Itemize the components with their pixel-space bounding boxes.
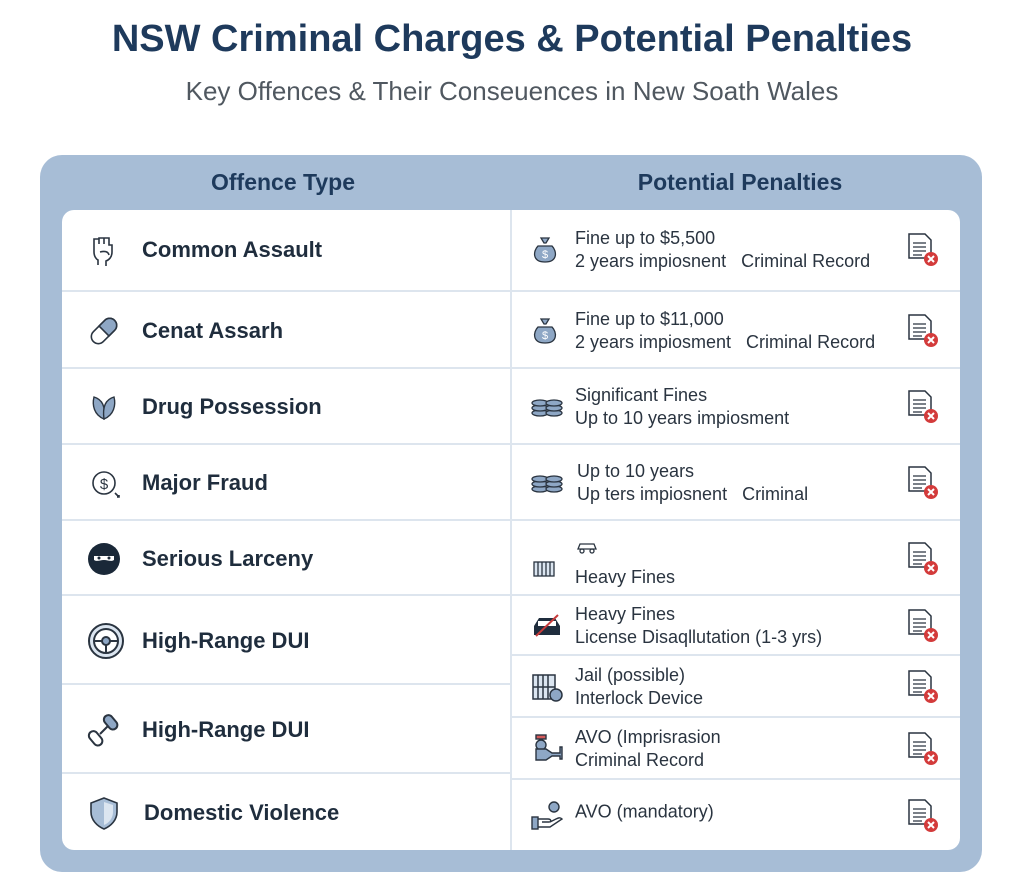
offence: major fraud (62, 443, 511, 521)
subtitle: Key Offences & Their Conseuences in New Soath Wales (186, 76, 838, 106)
heading: potential penalties: Potential Penalties (638, 169, 842, 195)
text: AVO (Imprisrasion (575, 727, 721, 747)
text: License Disaqllutation (1-3 yrs) (575, 627, 822, 647)
offence: domestic violence: Domestic Violence (144, 800, 339, 825)
panel: table (40, 155, 982, 872)
text: $ (542, 330, 548, 342)
offence: common assault: Common Assault (142, 237, 322, 262)
text: Interlock Device (575, 688, 703, 708)
offence: high-range dui 2 (62, 683, 511, 774)
offence: high-range dui (62, 594, 511, 685)
offence: drug possession (62, 367, 511, 445)
offence: high-range dui 2: High-Range DUI (142, 716, 309, 742)
offence: domestic violence (62, 772, 511, 852)
penalty rows: Fine up to $5,500 (575, 228, 715, 248)
offence: high-range dui: High-Range DUI (142, 628, 309, 652)
text: Heavy Fines (575, 567, 675, 587)
offence: cenat assarh (62, 290, 511, 369)
offence: major fraud: Major Fraud (142, 470, 268, 495)
title: NSW Criminal Charges & Potential Penalties (112, 18, 912, 60)
offence: drug possession: Drug Possession (142, 394, 322, 419)
text: Fine up to $11,000 (575, 308, 724, 328)
text: Criminal Record (575, 750, 704, 770)
text: AVO (mandatory) (575, 801, 714, 821)
text: Heavy Fines (575, 604, 675, 624)
text: Significant Fines (575, 385, 707, 405)
offence: cenat assarh: Cenat Assarh (142, 318, 283, 342)
text: Up to 10 years impiosment (575, 408, 789, 428)
penalty rows: $ (542, 249, 548, 261)
offence: major fraud: $ (100, 476, 109, 493)
offence: serious larceny: Serious Larceny (142, 546, 313, 570)
penalty rows (534, 228, 938, 271)
offence: serious larceny (62, 519, 511, 596)
text: Up to 10 years (577, 461, 694, 481)
text: Jail (possible) (575, 665, 685, 685)
offence: common assault (93, 237, 322, 266)
text: Up ters impiosnent Criminal (577, 484, 808, 504)
inner white table (62, 210, 960, 850)
heading: offence type: Offence Type (211, 169, 355, 195)
text: 2 years impiosment Criminal Record (575, 332, 875, 352)
penalty rows: 2 years impiosnent Criminal Record (575, 251, 870, 271)
